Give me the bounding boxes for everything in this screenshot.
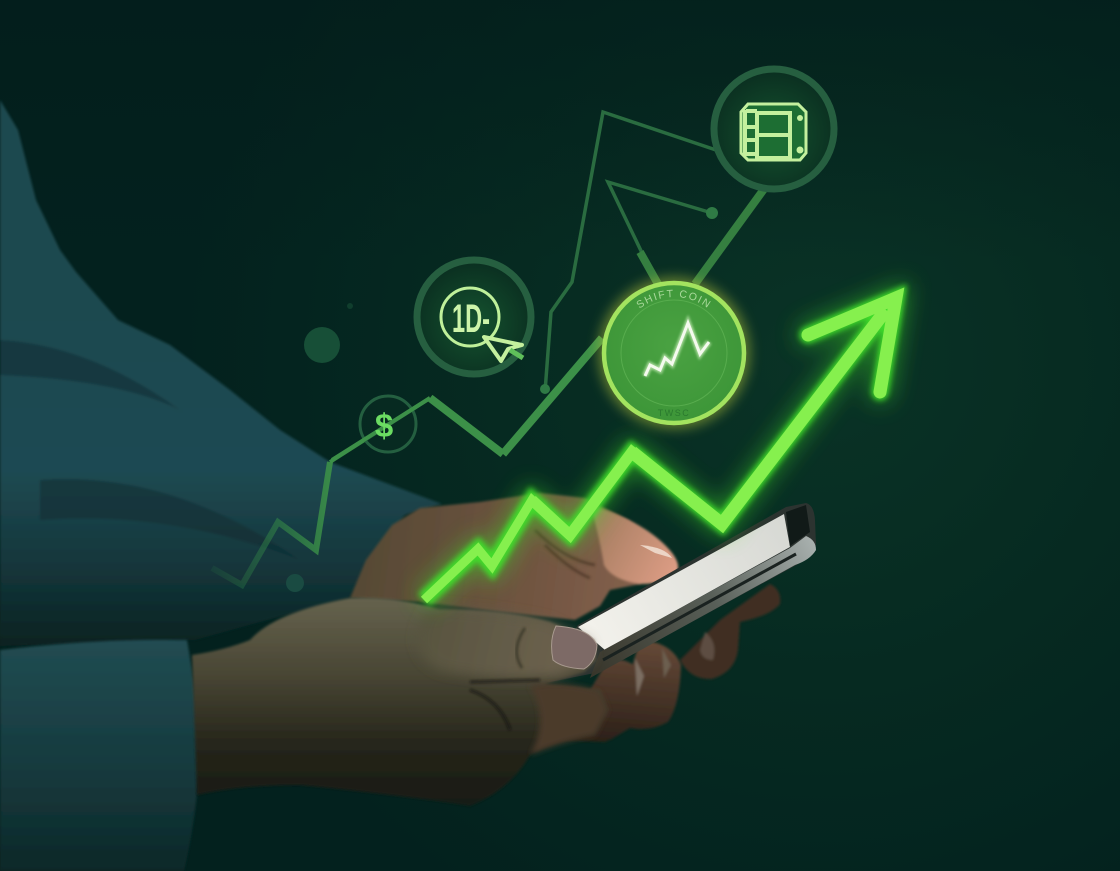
shift coin: TWSC (658, 408, 690, 418)
faint network lines (540, 112, 718, 394)
icon: 1D cursor: 1D- (452, 297, 490, 341)
decorative dots (286, 303, 353, 592)
main arrow glow (424, 298, 896, 600)
connector lines to coin (640, 178, 772, 284)
front hand (192, 598, 608, 806)
shift coin (602, 280, 746, 426)
back fingers (560, 584, 780, 742)
icon: dollar circle (332, 396, 430, 460)
icon: film chip (714, 69, 834, 189)
phone (540, 503, 816, 684)
back hand (350, 493, 678, 620)
upper sleeve (0, 100, 442, 646)
main green growth arrow (424, 298, 896, 600)
secondary trend line (212, 338, 602, 585)
shift coin: SHIFT COIN (636, 290, 711, 308)
icon: 1D cursor (417, 260, 531, 374)
lower cuff (0, 640, 200, 871)
icon: dollar circle: $ (375, 407, 393, 444)
coin glow (598, 277, 750, 429)
